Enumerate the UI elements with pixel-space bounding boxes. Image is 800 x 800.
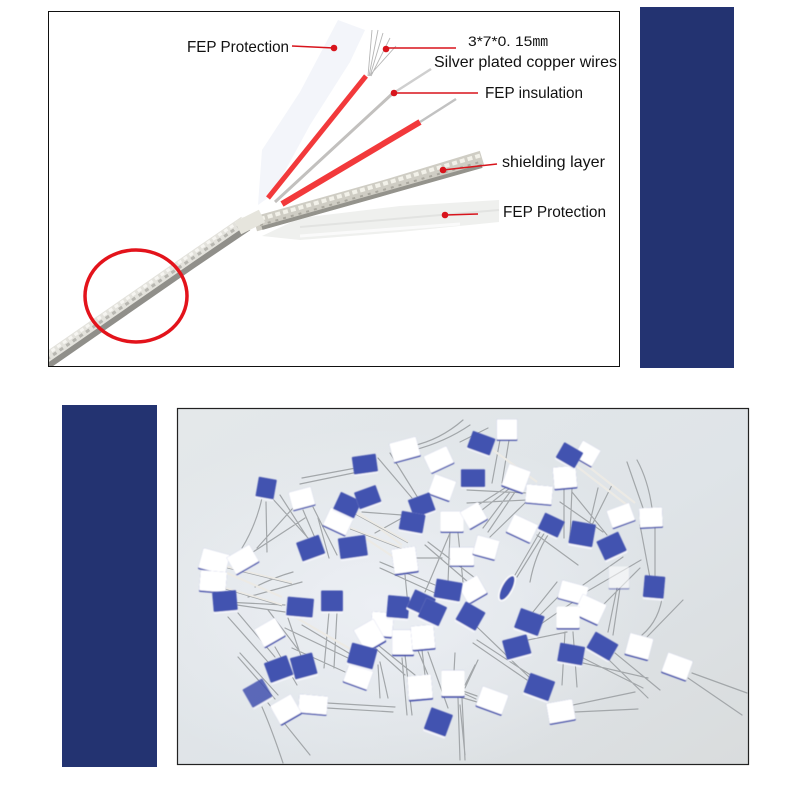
callout: wire spec: Silver plated copper wires: [434, 54, 617, 71]
silver strands: [368, 30, 396, 76]
shielding layer braid: [255, 155, 482, 228]
silver highlighted leads: [225, 450, 635, 650]
callout: FEP insulation: FEP insulation: [485, 85, 583, 102]
main braided cable: [40, 216, 262, 366]
callout: shielding layer: [440, 154, 606, 173]
red highlight circle: [85, 250, 187, 342]
blue sensor chips: [212, 431, 665, 739]
panel: navy block top right: [640, 7, 734, 368]
red insulated wire 2: [282, 99, 456, 204]
callout: FEP Protection lower: FEP Protection: [503, 204, 606, 221]
outer FEP protection sleeve, upper: [258, 20, 365, 205]
callout: wire spec: [383, 33, 617, 71]
panel: sensor photo: [178, 408, 748, 764]
callout: shielding layer: shielding layer: [502, 154, 606, 171]
panel: navy block bottom left: [62, 405, 157, 767]
callout: wire spec: 3*7*0. 15㎜: [468, 33, 548, 49]
lower FEP protection sleeve: [262, 200, 499, 240]
callout: FEP Protection upper: FEP Protection: [187, 39, 289, 56]
callout: FEP insulation: [391, 85, 583, 102]
red insulated wire 1: [268, 76, 366, 198]
panel: cable diagram: [40, 12, 620, 366]
component leads: [225, 420, 747, 763]
callout: FEP Protection lower: [442, 204, 606, 221]
grey insulated wire: [275, 69, 431, 202]
white sensor chips: [198, 419, 693, 726]
